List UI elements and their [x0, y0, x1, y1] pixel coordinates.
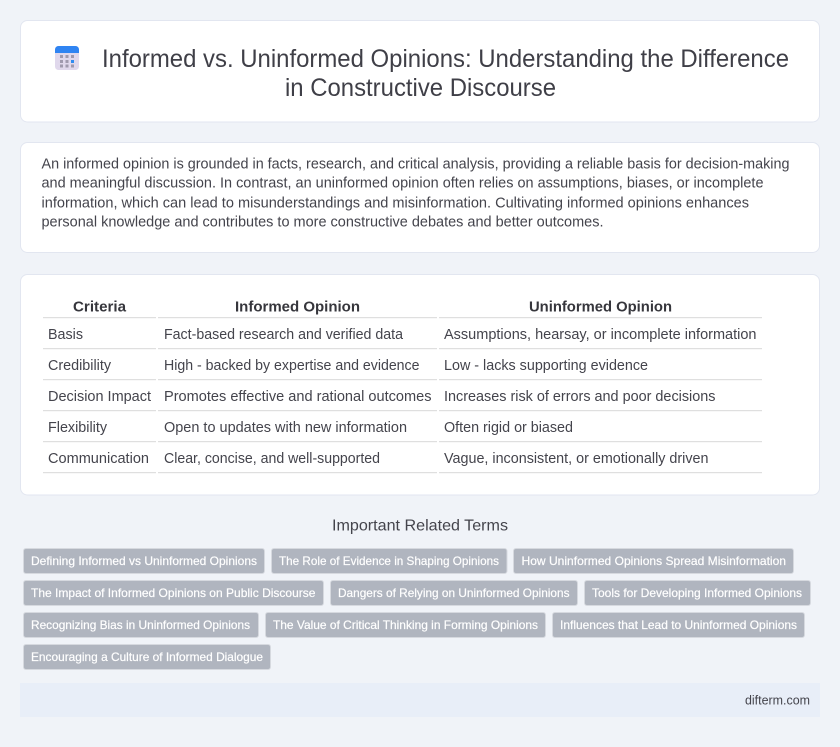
intro text block: and meaningful discussion. In contrast, an uninformed opinion often relies on assumptions, biases, or incomplete	[42, 176, 764, 192]
table row: credibility: Credibility	[48, 358, 112, 374]
table row: communication: Communication	[48, 451, 149, 467]
table row: flexibility: Flexibility	[48, 420, 108, 436]
tag: Encouraging a Culture of Informed Dialogue	[31, 650, 263, 664]
tag	[24, 548, 264, 574]
intro text block: information, which can lead to misunderstandings and misinformation. Cultivating informed opinions enhances	[42, 195, 749, 211]
table row: flexibility: Open to updates with new information	[164, 420, 407, 436]
table row: communication: Clear, concise, and well-supported	[164, 451, 380, 467]
panel: title header	[20, 20, 820, 122]
tag	[24, 580, 324, 606]
tag: Dangers of Relying on Uninformed Opinions	[338, 586, 570, 600]
intro text block	[42, 156, 790, 231]
table header row: Informed Opinion	[235, 300, 360, 316]
tag: The Value of Critical Thinking in Forming Opinions	[273, 618, 538, 632]
tag: Influences that Lead to Uninformed Opinions	[560, 618, 797, 632]
tag	[584, 580, 810, 606]
table row: decision impact: Increases risk of errors and poor decisions	[444, 389, 716, 405]
panel: comparison table	[20, 274, 820, 495]
tag	[24, 644, 270, 670]
table row: decision impact	[48, 389, 716, 405]
table row: basis	[48, 327, 756, 343]
tag	[330, 580, 578, 606]
table row: basis: Assumptions, hearsay, or incomplete information	[444, 327, 756, 343]
table row: decision impact: Decision Impact	[48, 389, 151, 405]
tag: The Role of Evidence in Shaping Opinions	[279, 554, 499, 568]
table row: decision impact: Promotes effective and rational outcomes	[164, 389, 432, 405]
tag: How Uninformed Opinions Spread Misinformation	[522, 554, 786, 568]
related term tags	[24, 548, 810, 670]
tag	[24, 612, 258, 638]
table row: communication	[48, 451, 708, 467]
table row: communication: Vague, inconsistent, or emotionally driven	[444, 451, 708, 467]
intro text block: personal knowledge and contributes to more constructive debates and better outcomes.	[42, 215, 604, 231]
table row: basis: Basis	[48, 327, 83, 343]
table header row: Criteria	[73, 300, 127, 316]
tag	[272, 548, 507, 574]
tag: The Impact of Informed Opinions on Public Discourse	[31, 586, 316, 600]
tag	[514, 548, 794, 574]
table header row: Uninformed Opinion	[529, 300, 672, 316]
heading: important related terms: Important Related Terms	[332, 518, 508, 534]
table row: credibility: Low - lacks supporting evidence	[444, 358, 648, 374]
table row: credibility	[48, 358, 648, 374]
table row: flexibility: Often rigid or biased	[444, 420, 573, 436]
table header row	[73, 300, 672, 316]
icon: calendar	[55, 46, 79, 70]
title: in Constructive Discourse	[285, 74, 556, 102]
title: Informed vs. Uninformed Opinions: Understanding the Difference	[102, 45, 789, 73]
footer bar	[20, 683, 820, 717]
table row: flexibility	[48, 420, 573, 436]
footer site name: difterm.com	[745, 692, 810, 708]
table row: basis: Fact-based research and verified data	[164, 327, 403, 343]
intro text block: An informed opinion is grounded in facts, research, and critical analysis, providing a reliable basis for decision-making	[42, 156, 790, 172]
table row: credibility: High - backed by expertise and evidence	[164, 358, 420, 374]
tag	[552, 612, 804, 638]
panel: introduction	[20, 142, 820, 252]
tag: Recognizing Bias in Uninformed Opinions	[31, 618, 250, 632]
tag: Defining Informed vs Uninformed Opinions	[31, 554, 257, 568]
title	[102, 45, 789, 102]
tag	[266, 612, 546, 638]
tag: Tools for Developing Informed Opinions	[592, 586, 802, 600]
